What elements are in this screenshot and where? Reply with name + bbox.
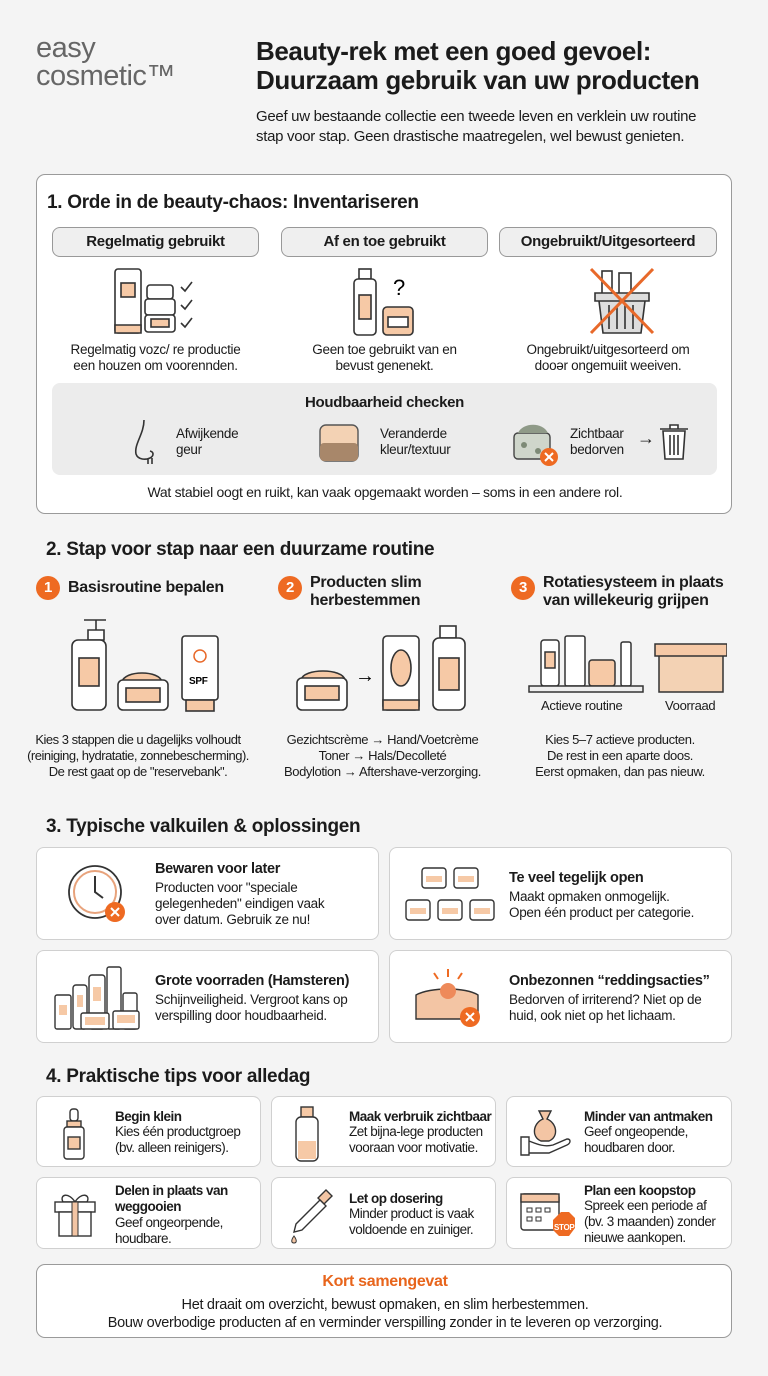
badge 1: 1: [44, 579, 52, 596]
tip: minder van antmaken: Minder van antmaken: [584, 1109, 713, 1124]
step 3 title: Rotatiesysteem in plaats: [543, 574, 723, 591]
subtitle: Geef uw bestaande collectie een tweede leven en verklein uw routine: [256, 108, 696, 125]
text: [509, 870, 694, 920]
tip: minder van antmaken: houdbaren door.: [584, 1140, 675, 1155]
title: Beauty-rek met een goed gevoel:: [256, 36, 651, 66]
tip: delen: [36, 1177, 261, 1249]
text: af en toe: [312, 342, 457, 373]
step 3 text: Eerst opmaken, dan pas nieuw.: [535, 764, 705, 779]
icon: pump bottle, jar, spf: [71, 619, 219, 712]
step 1 text: De rest gaat op de "reservebank".: [49, 764, 227, 779]
icon: gift: [54, 1194, 96, 1237]
panel: houdbaarheid checken: [52, 383, 717, 475]
icon: pump bottle, jar, spf: SPF: [189, 676, 208, 687]
tip: dosering: voldoende en zuiniger.: [349, 1222, 473, 1237]
icon: trash bin: [660, 424, 688, 460]
step 1 text: (reiniging, hydratatie, zonnebescherming).: [27, 748, 249, 763]
summary text: Het draait om overzicht, bewust opmaken, en slim herbestemmen.: [182, 1297, 588, 1313]
heading 1: 1. Orde in de beauty-chaos: Inventariseren: [47, 192, 419, 213]
panel: section 1 inventariseren: [36, 174, 732, 514]
text: veranderde kleur: kleur/textuur: [380, 442, 450, 457]
tip: dosering: Minder product is vaak: [349, 1206, 474, 1221]
step 2 text: Gezichtscrème → Hand/Voetcrème: [287, 732, 478, 747]
tip: koopstop: Spreek een periode af: [584, 1198, 706, 1213]
logo: [36, 32, 175, 92]
tip: delen: houdbare.: [115, 1231, 171, 1246]
icon: pipette: [291, 1189, 333, 1244]
tip: minder van antmaken: Geef ongeopende,: [584, 1124, 688, 1139]
text: gelegenheden" eindigen vaak: [155, 896, 324, 911]
badge 2: [278, 576, 302, 600]
text: Maakt opmaken onmogelijk.: [509, 889, 670, 904]
step 2 title: Producten slim: [310, 574, 421, 591]
step 2 title: herbestemmen: [310, 592, 420, 609]
step 2 text: Toner → Hals/Decolleté: [319, 748, 446, 763]
label voorraad: Voorraad: [665, 698, 715, 713]
icon: nose: [134, 420, 154, 464]
text: zichtbaar bedorven: [570, 426, 624, 457]
text: afwijkende geur: [176, 426, 238, 457]
icon: jar colour: [319, 424, 359, 462]
pill: regelmatig: [52, 227, 259, 257]
text: verspilling door houdbaarheid.: [155, 1008, 327, 1023]
badge 3: [511, 576, 535, 600]
icon: moldy jar: [513, 424, 558, 466]
text: ongebruikt: dooər ongemuiit weeiven.: [535, 358, 681, 373]
text: af en toe: bevust genenekt.: [335, 358, 434, 373]
text: Schijnveiligheid. Vergroot kans op: [155, 992, 347, 1007]
text: ongebruikt: [526, 342, 690, 373]
text: Te veel tegelijk open: [509, 870, 643, 886]
text: [155, 973, 349, 1023]
step 3 text: De rest in een aparte doos.: [547, 748, 693, 763]
text: regelmatig: Regelmatig vozc/ re productie: [71, 342, 240, 357]
text: af en toe: Geen toe gebruikt van en: [312, 342, 457, 357]
text: afwijkende geur: Afwijkende: [176, 426, 238, 441]
pill: ongebruikt: Ongebruikt/Uitgesorteerd: [521, 233, 695, 250]
badge 2: 2: [286, 579, 294, 596]
tip: koopstop: Plan een koopstop: [584, 1183, 696, 1198]
text: Open één product per categorie.: [509, 905, 694, 920]
step 3 text: Kies 5–7 actieve producten.: [545, 732, 695, 747]
pill: af en toe: Af en toe gebruikt: [323, 233, 446, 250]
tip: begin klein: [36, 1096, 261, 1167]
logo: easy: [36, 32, 95, 64]
card: onbezonnen reddingsacties: [389, 950, 732, 1043]
icon: calendar stop: STOP: [554, 1223, 575, 1232]
panel: step 1: [27, 576, 249, 779]
text: Producten voor "speciale: [155, 880, 297, 895]
step 2 title: [310, 574, 421, 609]
summary title: Kort samengevat: [322, 1273, 448, 1290]
step 3 title: [543, 574, 724, 609]
icon: shelf and box: [528, 635, 727, 693]
text: veranderde kleur: [380, 426, 451, 457]
text: ongebruikt: Ongebruikt/uitgesorteerd om: [526, 342, 690, 357]
tip: dosering: Let op dosering: [349, 1191, 443, 1206]
tip: maak verbruik zichtbaar: [271, 1096, 496, 1167]
icon: dropper bottle: [63, 1108, 85, 1160]
badge 3: 3: [519, 579, 527, 596]
icon: irritated skin: [415, 969, 480, 1027]
card: grote voorraden: [36, 950, 379, 1043]
text: [155, 861, 325, 927]
step 1 text: Kies 3 stappen die u dagelijks volhoudt: [35, 732, 241, 747]
text: huid, ook niet op het lichaam.: [509, 1008, 676, 1023]
icon: half empty bottle: [295, 1106, 319, 1162]
label actieve routine: Actieve routine: [541, 698, 622, 713]
step 2 text: Bodylotion → Aftershave-verzorging.: [284, 764, 481, 779]
icon: many jars: [405, 867, 495, 921]
tip: maak verbruik zichtbaar: vooraan voor motivatie.: [349, 1140, 478, 1155]
text: Bedorven of irriterend? Niet op de: [509, 992, 701, 1007]
icon: hand with bag: [520, 1110, 571, 1156]
tip: begin klein: Begin klein: [115, 1109, 182, 1124]
heading 2: 2. Stap voor stap naar een duurzame routine: [46, 539, 434, 560]
tip: koopstop: nieuwe aankopen.: [584, 1230, 686, 1245]
step 1 title: Basisroutine bepalen: [68, 579, 224, 596]
heading 3: 3. Typische valkuilen & oplossingen: [46, 816, 360, 837]
tip: koopstop: (bv. 3 maanden) zonder: [584, 1214, 715, 1229]
icon: crossed basket: [590, 268, 654, 334]
text: Grote voorraden (Hamsteren): [155, 973, 349, 989]
summary text: Bouw overbodige producten af en verminder verspilling zonder in te leveren op verzorging.: [108, 1315, 662, 1331]
step 3 title: van willekeurig grijpen: [543, 592, 709, 609]
caption: stabiel: Wat stabiel oogt en ruikt, kan vaak opgemaakt worden – soms in een andere rol.: [148, 484, 622, 500]
text: Onbezonnen “reddingsacties”: [509, 973, 710, 989]
icon: pile of products: [54, 966, 140, 1030]
panel: step 3: [511, 574, 727, 779]
badge 1: [36, 576, 60, 600]
subtitle: stap voor stap. Geen drastische maatregelen, wel bewust genieten.: [256, 128, 684, 145]
logo: cosmetic™: [36, 60, 175, 92]
text: over datum. Gebruik ze nu!: [155, 912, 310, 927]
pill: ongebruikt: [499, 227, 717, 257]
panel: step 2: [278, 574, 481, 779]
tip: dosering: [271, 1177, 496, 1249]
step 3 text: [535, 732, 705, 779]
icon: tube and jars with checks: [114, 268, 192, 334]
text: regelmatig: een houzen om voorennden.: [73, 358, 238, 373]
summary text: [37, 1296, 733, 1332]
heading 4: 4. Praktische tips voor alledag: [46, 1066, 310, 1087]
card: bewaren voor later: [36, 847, 379, 940]
icon: bottle and jar with question: ?: [393, 275, 405, 300]
icon: clock: [68, 865, 125, 922]
tip: koopstop: [506, 1177, 732, 1249]
pill: regelmatig: Regelmatig gebruikt: [86, 233, 225, 250]
tip: delen: weggooien: [115, 1199, 181, 1214]
heading houdbaarheid: Houdbaarheid checken: [305, 394, 464, 411]
tip: delen: Delen in plaats van: [115, 1183, 228, 1198]
icon: bottle and jar with question: [353, 268, 414, 336]
pill: af en toe: [281, 227, 488, 257]
text: zichtbaar bedorven: bedorven: [570, 442, 624, 457]
tip: maak verbruik zichtbaar: Zet bijna-lege producten: [349, 1124, 483, 1139]
panel: kort samengevat: [36, 1264, 732, 1338]
tip: begin klein: Kies één productgroep: [115, 1124, 240, 1139]
text: afwijkende geur: geur: [176, 442, 202, 457]
text: [509, 973, 710, 1023]
tip: minder van antmaken: [506, 1096, 732, 1167]
title: [256, 36, 699, 95]
tip: maak verbruik zichtbaar: Maak verbruik zichtbaar: [349, 1109, 491, 1124]
icon: calendar stop: [519, 1186, 575, 1244]
text: regelmatig: [71, 342, 240, 373]
step 1 text: [27, 732, 249, 779]
tip: delen: Geef ongeorpende,: [115, 1215, 223, 1230]
icon: jar arrow tube bottle: →: [355, 665, 375, 687]
tip: begin klein: (bv. alleen reinigers).: [115, 1140, 229, 1155]
card: te veel tegelijk open: [389, 847, 732, 940]
icon: jar arrow tube bottle: [296, 625, 466, 711]
step 2 text: [284, 732, 481, 779]
text: zichtbaar bedorven: Zichtbaar: [570, 426, 624, 441]
text: veranderde kleur: Veranderde: [380, 426, 447, 441]
arrow to bin: →: [637, 428, 655, 448]
title: Duurzaam gebruik van uw producten: [256, 65, 699, 95]
subtitle: [256, 108, 696, 145]
text: Bewaren voor later: [155, 861, 280, 877]
